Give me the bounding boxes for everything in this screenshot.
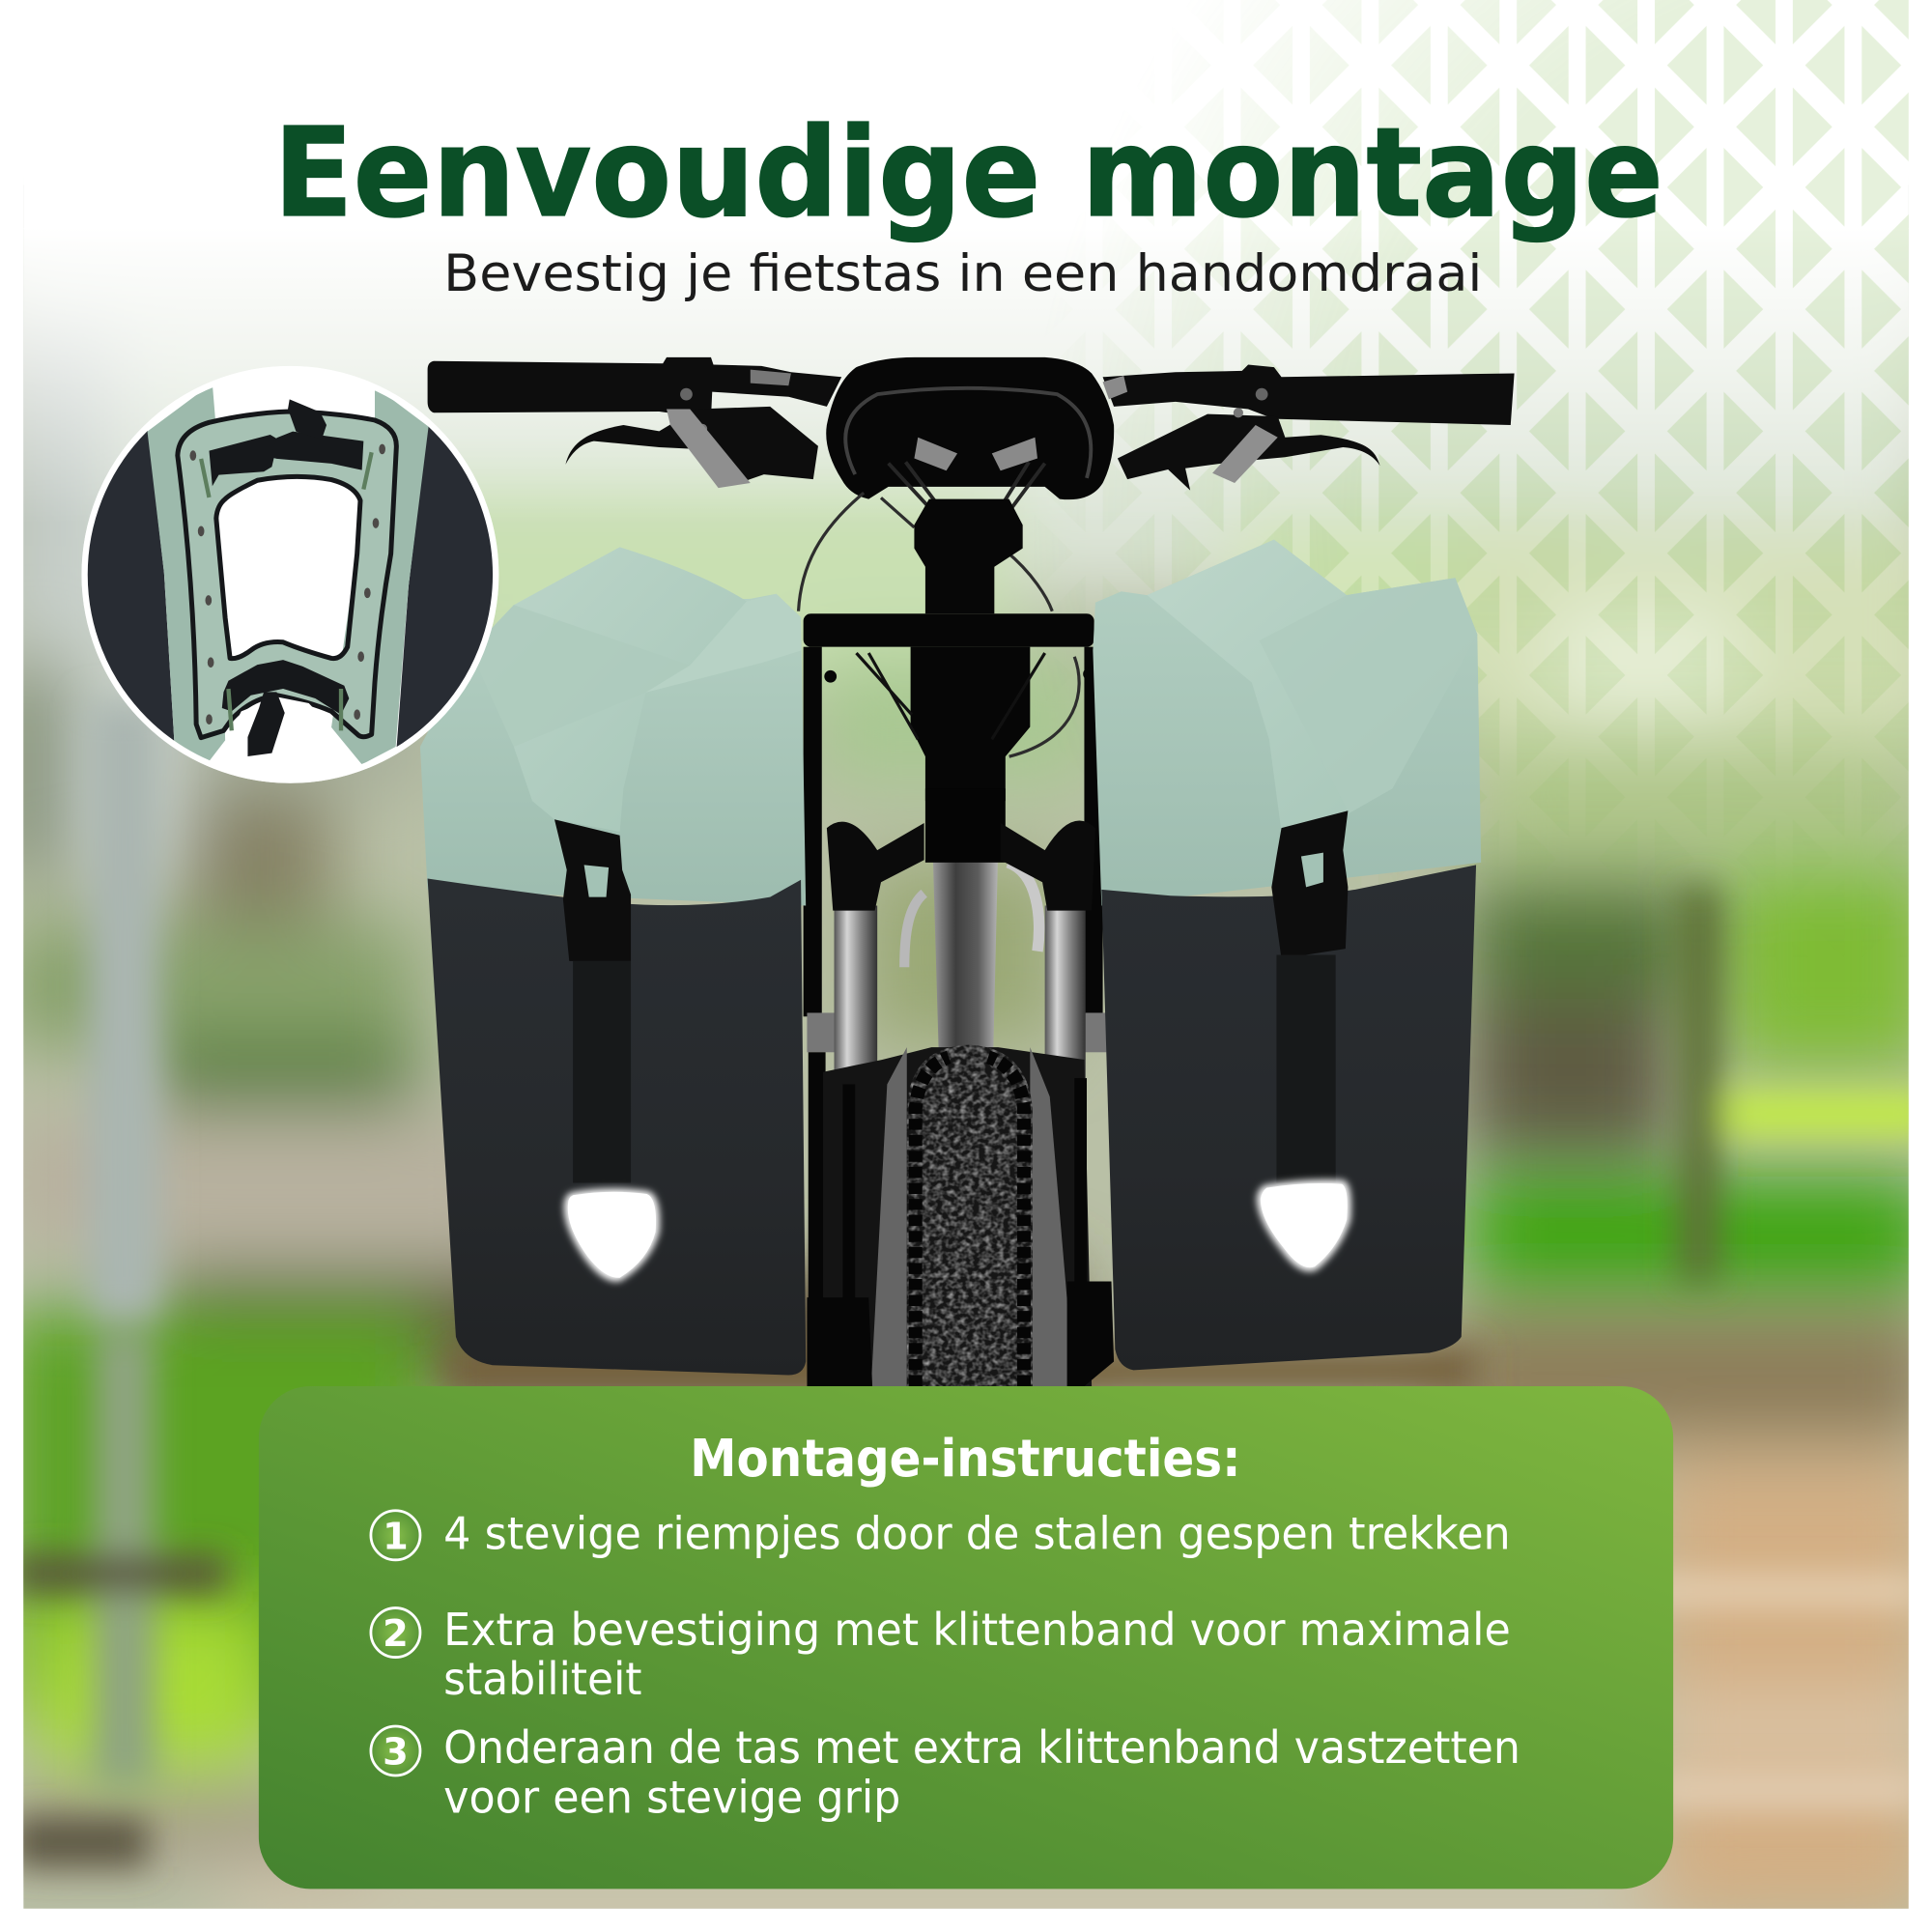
back plate frame [178,412,396,738]
reflector glow [1257,1179,1351,1271]
suspension fork [827,820,1095,1078]
step 3 [371,1721,1520,1823]
mint upper body [1093,540,1481,906]
mint upper body [420,594,806,906]
dark lower body [1101,865,1476,1370]
white fade at top of the photo [23,228,1909,524]
crease shading on flap [1260,578,1477,813]
left handlebar with grip and controls [428,357,841,488]
mint side strips [148,384,429,764]
triangle pattern, top right [1107,0,1909,772]
bicycle seen from behind [428,357,1515,1386]
buckle rods [201,452,372,730]
frame tube [933,850,998,1060]
mounting holes [189,444,385,724]
rear rack [804,613,1106,1386]
brake and gear cables [799,493,1079,756]
lower mounting hardware [807,1078,1114,1386]
reflector glow [564,1189,660,1282]
dark lower body [428,878,806,1375]
rear mudguard area [823,1047,1092,1386]
title: Eenvoudige montage [273,102,1663,245]
step 3: voor een stevige grip [443,1771,900,1823]
reflector [568,1192,656,1278]
left pannier bag [420,547,806,1375]
strap and buckle [1271,810,1348,1182]
step 3: Onderaan de tas met extra klittenband vastzetten [443,1721,1520,1774]
subtitle: Bevestig je fietstas in een handomdraai [443,244,1482,303]
velcro straps [209,399,363,756]
panel heading: Montage-instructies: [690,1428,1240,1489]
rear tyre [907,1045,1033,1386]
inset circle: mounting back plate [77,360,515,783]
step 1: 4 stevige riempjes door de stalen gespen trekken [443,1507,1511,1559]
stem and seat clamp [914,499,1023,613]
strap and buckle [554,819,631,1182]
dark bag sides [87,425,493,748]
step 3: 3 [383,1731,409,1775]
saddle [826,357,1114,511]
step 2: stabiliteit [443,1653,642,1705]
white cutout below [240,697,334,730]
step 2: Extra bevestiging met klittenband voor maximale [443,1604,1511,1656]
step 2: 2 [383,1612,409,1656]
right pannier bag [1093,540,1481,1370]
instructions panel [259,1386,1673,1889]
step 1: 1 [383,1515,409,1558]
reflector [1261,1183,1348,1267]
upper fold on back panel [645,594,801,693]
crease shading on flap [470,605,690,747]
roll-top flap [1148,540,1477,832]
roll-top flap [470,547,747,832]
right handlebar with grip and controls [1103,365,1515,491]
step 2 [371,1604,1511,1705]
